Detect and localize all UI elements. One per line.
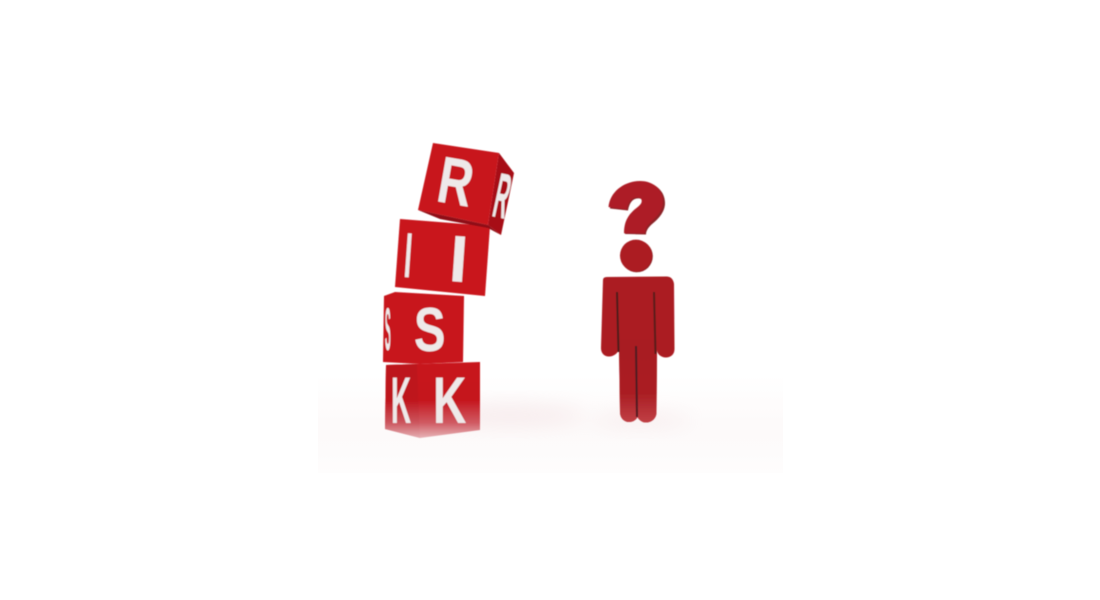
floor shadow bbox=[435, 404, 690, 426]
letter cube stack bbox=[383, 143, 516, 438]
cube S: S bbox=[414, 295, 445, 365]
head bbox=[620, 240, 653, 272]
cube R: R bbox=[488, 160, 516, 233]
cube I bbox=[395, 219, 490, 296]
cube S bbox=[383, 292, 464, 365]
floor background bbox=[318, 375, 783, 473]
cube I: I bbox=[447, 221, 470, 296]
cube K bbox=[385, 362, 480, 438]
person with question mark bbox=[601, 181, 674, 422]
question mark bbox=[608, 181, 665, 234]
cube K: K bbox=[391, 363, 411, 437]
cube I: I bbox=[402, 221, 414, 292]
cube S: S bbox=[385, 297, 391, 364]
cube R: R bbox=[432, 143, 479, 222]
arm and leg slits bbox=[617, 292, 656, 417]
cube K: K bbox=[433, 364, 466, 438]
body bbox=[601, 276, 674, 422]
cube R bbox=[418, 143, 516, 235]
